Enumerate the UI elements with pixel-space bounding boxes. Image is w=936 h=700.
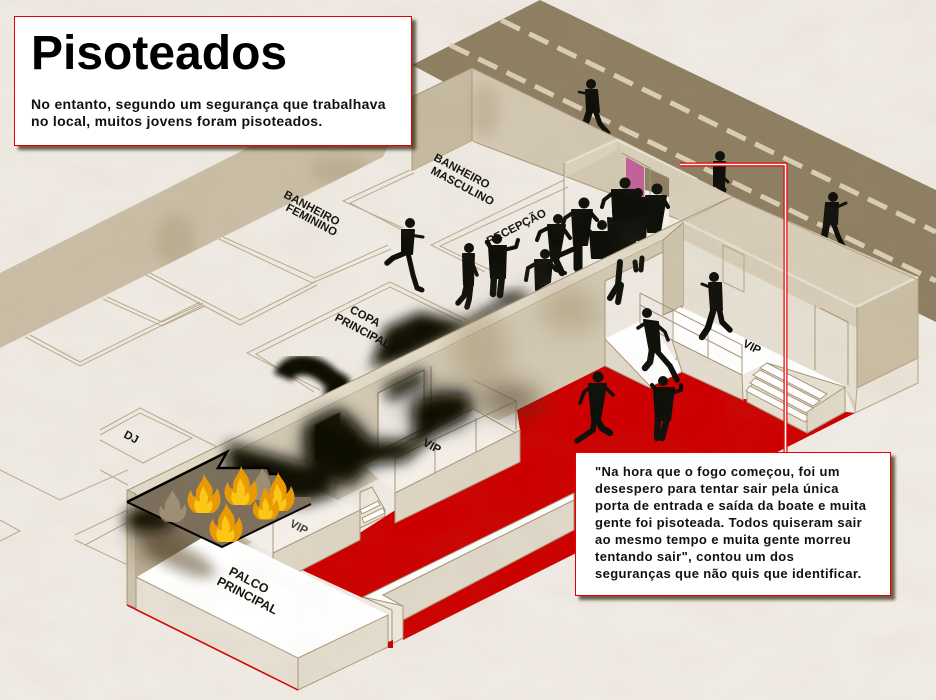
right building box: [684, 197, 918, 413]
quote text: porta de entrada e saída da boate e muita: [595, 498, 866, 513]
stage edge smoke: [140, 531, 220, 585]
person on road 1: [579, 79, 608, 133]
label: VIP right: VIP: [741, 338, 763, 357]
wall blotches: [155, 84, 499, 266]
back left wall band: [0, 65, 412, 348]
room label: Banheiro Feminino: BANHEIRO: [282, 189, 341, 228]
title panel: [14, 16, 412, 146]
railing: [640, 293, 742, 375]
VIP platform left with stairs: [230, 478, 385, 585]
VIP platform right: [640, 293, 845, 433]
person standing: [458, 243, 477, 307]
quote text: ao mesmo tempo e muita gente morreu: [595, 532, 851, 547]
back right wall: [472, 68, 733, 240]
main stage Palco Principal: [127, 530, 388, 690]
pink door: [626, 157, 644, 214]
palco back wall: [136, 455, 230, 577]
intro text: no local, muitos jovens foram pisoteados.: [31, 113, 323, 129]
room label: DJ: DJ: [122, 429, 140, 447]
person running on red floor: [577, 372, 613, 441]
smoke in front of wall: [124, 368, 470, 561]
flame 4: [253, 488, 279, 519]
red carpet floor: [302, 366, 855, 640]
quote text: desespero para tentar sair pela única: [595, 481, 839, 496]
room outlines: [0, 170, 568, 565]
flame 5: [210, 503, 242, 542]
intro text: No entanto, segundo um segurança que trabalhava: [31, 96, 386, 112]
person on road 2: [714, 151, 728, 190]
room label: Copa Principal: COPA: [348, 304, 382, 330]
label: VIP left: VIP: [288, 518, 310, 538]
heading: Pisoteados: [31, 27, 287, 80]
quote text: [595, 464, 866, 581]
stairs right: [747, 363, 845, 433]
front main wall top band: [128, 197, 733, 505]
wall end pier: [127, 490, 136, 608]
room label: Banheiro Feminino: FEMININO: [284, 202, 339, 239]
smoke behind front wall: [283, 280, 533, 395]
person arms raised on red floor: [652, 376, 681, 438]
flame 3: [262, 472, 294, 511]
outside floor patch: [412, 65, 444, 99]
room label: Banheiro Masculino: MASCULINO: [429, 165, 496, 208]
person with raised arms: [487, 234, 518, 295]
road dashes: lower row: [450, 45, 936, 281]
dark lintel behind door: [645, 167, 669, 197]
person running on ramp: [638, 308, 677, 380]
wall staining: [450, 286, 600, 390]
legs seen through opening: [610, 258, 642, 302]
fire floor slab: [127, 452, 311, 547]
ramp to VIP: [605, 317, 682, 388]
callout connector line: [680, 164, 786, 452]
quote callout panel: [575, 452, 891, 596]
barrier wall near exit: [363, 493, 574, 648]
ghost flames: [159, 468, 276, 522]
person on road 3: [824, 192, 846, 248]
quote text: "Na hora que o fogo começou, foi um: [595, 464, 840, 479]
person running, left: [387, 218, 423, 290]
interior floor: [0, 141, 680, 555]
quote text: tentando sair", contou um dos: [595, 549, 794, 564]
label: Palco Principal: PRINCIPAL: [215, 574, 280, 618]
crowd group by the door: [602, 178, 668, 256]
flame 1: [188, 474, 220, 513]
crowd crouched runner: [526, 249, 565, 290]
road dashes: upper row: [501, 20, 936, 232]
entrance box translucent walls: [564, 138, 733, 225]
label: Palco Principal: PALCO: [227, 564, 271, 597]
crowd person facing away: [588, 220, 610, 258]
room label: Copa Principal: PRINCIPAL: [333, 312, 392, 351]
crowd runner 2: [560, 198, 597, 268]
front main wall face: [128, 240, 663, 600]
opening to VIP: [605, 252, 690, 385]
room label: Recepção: RECEPÇÃO: [484, 206, 548, 248]
flame 2: [225, 466, 257, 505]
wall corner left face: [412, 68, 472, 171]
label: VIP center: VIP: [421, 437, 443, 457]
room label: Banheiro Masculino: BANHEIRO: [432, 152, 491, 191]
quote text: gente foi pisoteada. Todos quiseram sair: [595, 515, 862, 530]
quote text: seguranças que não quis que identificar.: [595, 566, 862, 581]
crowd runner: [537, 214, 570, 273]
intro text: [31, 96, 386, 129]
person running, top of VIP: [702, 272, 730, 337]
road with pedestrians: [412, 0, 936, 322]
door openings on front wall: [315, 366, 431, 467]
VIP platform center: [363, 380, 520, 523]
front door pillar: [663, 222, 684, 315]
